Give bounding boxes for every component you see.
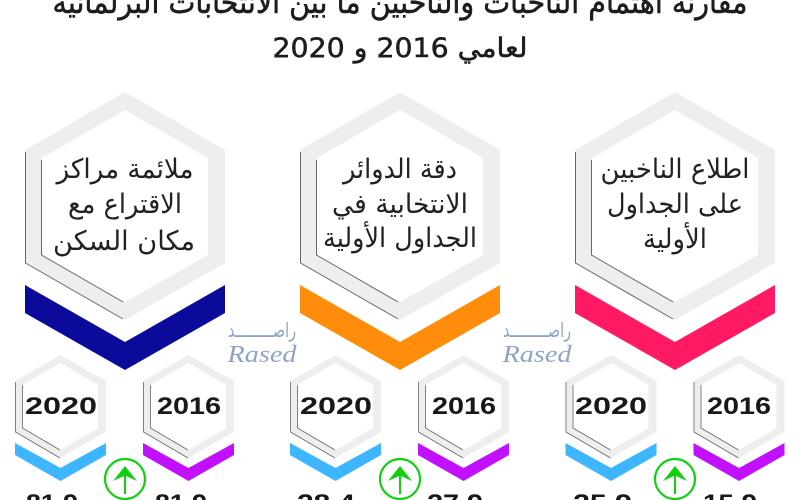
heading text: ملائمة مراكز	[55, 154, 194, 185]
title: لعامي 2016 و 2020	[272, 33, 528, 64]
heading text: على الجداول	[607, 189, 743, 220]
hexagon 2020: 2020	[25, 393, 97, 420]
watermark: Rased left: Rased	[226, 342, 298, 368]
hexagon 2016: 2016	[707, 393, 771, 420]
comparison group 3	[566, 355, 784, 500]
hexagon 2020: 2020	[575, 393, 647, 420]
hexagon 2016: 2016	[432, 393, 496, 420]
large hexagon	[25, 92, 225, 320]
heading text: الانتخابية في	[332, 189, 468, 220]
hexagon 2016	[694, 355, 784, 481]
panel: constituency accuracy	[300, 92, 500, 370]
panel: voting centre suitability	[25, 92, 225, 370]
hexagon 2020	[566, 355, 656, 481]
panel: voter list review	[575, 92, 775, 370]
icon: up arrow	[655, 459, 695, 499]
hexagon 2020: 2020	[300, 393, 372, 420]
heading text: الجداول الأولية	[323, 220, 477, 254]
chevron navy	[25, 285, 225, 370]
hexagon 2016	[418, 355, 509, 481]
comparison group 1	[15, 355, 234, 500]
hexagon 2016: 2016	[157, 393, 221, 420]
heading text: الاقتراع مع	[68, 189, 182, 220]
large hexagon	[575, 92, 775, 320]
comparison group 2	[290, 355, 509, 500]
icon: up arrow	[380, 459, 420, 499]
chevron orange	[300, 285, 500, 370]
heading text: الأولية	[643, 221, 707, 255]
hexagon 2016	[143, 355, 234, 481]
watermark: Rased left: راصـــــــــد	[228, 318, 296, 342]
heading text: دقة الدوائر	[341, 154, 457, 185]
heading text	[323, 154, 477, 254]
title	[52, 0, 748, 64]
large hexagon	[300, 92, 500, 320]
heading text: اطلاع الناخبين	[600, 154, 750, 185]
watermark: Rased left	[226, 318, 298, 368]
icon: up arrow	[105, 459, 145, 499]
watermark: Rased right: Rased	[501, 342, 573, 368]
watermark: Rased right: راصـــــــــد	[503, 318, 571, 342]
heading text	[600, 154, 750, 255]
heading text: مكان السكن	[53, 226, 195, 257]
heading text	[53, 154, 195, 257]
watermark: Rased right	[501, 318, 573, 368]
hexagon 2020	[290, 355, 381, 481]
hexagon 2020	[15, 355, 106, 481]
chevron pink	[575, 285, 775, 370]
